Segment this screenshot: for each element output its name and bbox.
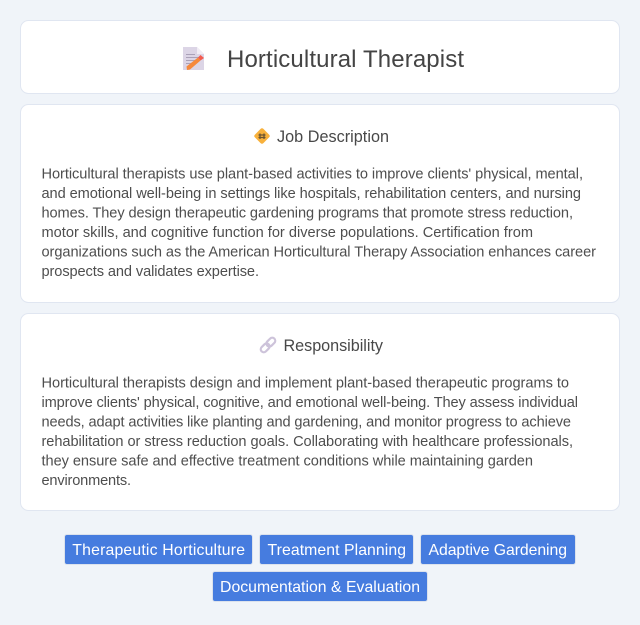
panel: title card bbox=[20, 20, 620, 94]
text block: responsibility: improve clients' physical, cognitive, and emotional well-being. They assess individual bbox=[42, 395, 578, 411]
text block: responsibility: environments. bbox=[42, 473, 131, 489]
tag: Adaptive Gardening: Adaptive Gardening bbox=[428, 542, 567, 559]
text block: job description: Horticultural therapists use plant-based activities to improve clients' physical, mental, bbox=[42, 166, 583, 182]
text block: responsibility: Horticultural therapists design and implement plant-based therapeutic programs to bbox=[42, 376, 569, 392]
panel: responsibility bbox=[20, 314, 620, 510]
heading: job description: Job Description bbox=[277, 128, 389, 146]
text block: job description: prospects and validates expertise. bbox=[42, 264, 259, 280]
text block: job description bbox=[42, 166, 596, 280]
text block: job description: motor skills, and cognitive function for diverse populations. Certification from bbox=[42, 225, 533, 241]
icon: document with pencil bbox=[183, 47, 204, 70]
tag: Treatment Planning bbox=[260, 534, 414, 564]
tag: Documentation & Evaluation: Documentation & Evaluation bbox=[220, 579, 420, 596]
text block: job description: organizations such as the American Horticultural Therapy Association enhances career bbox=[42, 244, 596, 260]
tag: Documentation & Evaluation bbox=[212, 572, 428, 602]
tag: Treatment Planning: Treatment Planning bbox=[268, 542, 406, 559]
panel: job description bbox=[20, 104, 620, 302]
text block: job description: homes. They design therapeutic gardening programs that promote stress reduction, bbox=[42, 206, 573, 222]
tag: Adaptive Gardening bbox=[420, 534, 576, 564]
title: Horticultural Therapist bbox=[227, 46, 464, 73]
tag: Therapeutic Horticulture bbox=[64, 534, 252, 564]
text block: responsibility bbox=[42, 376, 578, 489]
text block: responsibility: rehabilitation or stress reduction goals. Collaborating with healthcare professionals, bbox=[42, 434, 573, 450]
text block: responsibility: they ensure safe and effective treatment conditions while maintaining garden bbox=[42, 454, 533, 470]
text block: job description: and emotional well-being in settings like hospitals, rehabilitation centers, and nursing bbox=[42, 186, 581, 202]
heading: responsibility: Responsibility bbox=[284, 337, 384, 355]
icon: job description diamond bbox=[254, 128, 270, 144]
tag: Therapeutic Horticulture: Therapeutic Horticulture bbox=[72, 542, 245, 559]
icon: link bbox=[260, 337, 276, 353]
text block: responsibility: needs, adapt activities like planting and gardening, and monitor progress to achieve bbox=[42, 414, 571, 430]
